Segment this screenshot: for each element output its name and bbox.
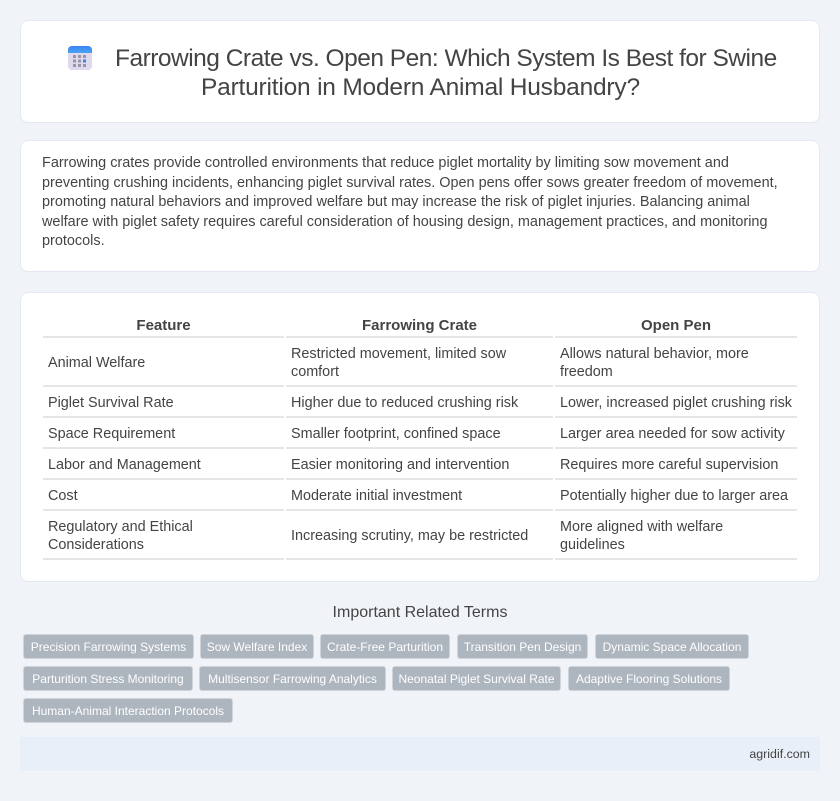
row: cost: Moderate initial investment: [291, 488, 462, 504]
related terms chips: Transition Pen Design: [464, 640, 581, 654]
title: [115, 45, 777, 101]
row: space requirement: [48, 426, 785, 442]
title: Farrowing Crate vs. Open Pen: Which System Is Best for Swine: [115, 45, 777, 72]
title: Parturition in Modern Animal Husbandry?: [201, 74, 640, 101]
row: animal welfare: freedom: [560, 364, 613, 380]
row: cost: Potentially higher due to larger area: [560, 488, 788, 504]
related terms chips: Sow Welfare Index: [207, 640, 307, 654]
row: animal welfare: [48, 346, 749, 380]
row: piglet survival rate: Lower, increased piglet crushing risk: [560, 395, 792, 411]
text block: introduction: preventing crushing incidents, enhancing piglet survival rates. Open pens offer sows greater freedom of movement,: [42, 175, 778, 191]
panel: introduction: [20, 140, 820, 272]
related terms chips: Adaptive Flooring Solutions: [576, 672, 722, 686]
text block: introduction: protocols.: [42, 233, 105, 249]
row: piglet survival rate: [48, 395, 792, 411]
row: regulatory and ethical considerations: Considerations: [48, 537, 144, 553]
table header: Farrowing Crate: [362, 317, 477, 334]
row: regulatory and ethical considerations: Regulatory and Ethical: [48, 519, 193, 535]
row: labor and management: Labor and Management: [48, 457, 201, 473]
row: regulatory and ethical considerations: Increasing scrutiny, may be restricted: [291, 528, 528, 544]
related terms chips: Multisensor Farrowing Analytics: [208, 672, 377, 686]
row: regulatory and ethical considerations: guidelines: [560, 537, 625, 553]
footer bar: [20, 737, 820, 771]
row: labor and management: [48, 457, 778, 473]
row: cost: Cost: [48, 488, 78, 504]
related terms chips: Human-Animal Interaction Protocols: [32, 704, 224, 718]
table header: [136, 317, 711, 334]
related terms chips: [23, 634, 749, 723]
row: regulatory and ethical considerations: [48, 519, 723, 553]
table header: Open Pen: [641, 317, 711, 334]
row: cost: [48, 488, 788, 504]
related terms chips: Precision Farrowing Systems: [31, 640, 186, 654]
row: labor and management: Easier monitoring and intervention: [291, 457, 509, 473]
row: animal welfare: Restricted movement, limited sow: [291, 346, 506, 362]
footer source: agridif.com: [749, 747, 810, 761]
related terms chips: Crate-Free Parturition: [327, 640, 443, 654]
panel: header: [20, 20, 820, 123]
row: animal welfare: Animal Welfare: [48, 355, 145, 371]
row: labor and management: Requires more careful supervision: [560, 457, 778, 473]
panel: comparison table: [20, 292, 820, 582]
related terms chips: Neonatal Piglet Survival Rate: [398, 672, 555, 686]
row: animal welfare: comfort: [291, 364, 339, 380]
text block: introduction: Farrowing crates provide controlled environments that reduce piglet mortality by limiting sow movement and: [42, 155, 729, 171]
related terms chips: Dynamic Space Allocation: [603, 640, 741, 654]
related terms chips: Parturition Stress Monitoring: [32, 672, 184, 686]
row: animal welfare: Allows natural behavior, more: [560, 346, 749, 362]
row: space requirement: Space Requirement: [48, 426, 175, 442]
row: space requirement: Smaller footprint, confined space: [291, 426, 501, 442]
row: piglet survival rate: Piglet Survival Rate: [48, 395, 174, 411]
table header: Feature: [136, 317, 191, 334]
text block: introduction: [42, 155, 778, 249]
heading: important related terms: Important Related Terms: [333, 604, 507, 621]
text block: introduction: promoting natural behaviors and improved welfare but may increase the risk of piglet injuries. Balancing animal: [42, 194, 750, 210]
icon: calendar: [68, 46, 92, 70]
row: regulatory and ethical considerations: More aligned with welfare: [560, 519, 723, 535]
text block: introduction: welfare with piglet safety requires careful consideration of housing design, management practices, and monitoring: [42, 214, 767, 230]
row: piglet survival rate: Higher due to reduced crushing risk: [291, 395, 518, 411]
row: space requirement: Larger area needed for sow activity: [560, 426, 785, 442]
